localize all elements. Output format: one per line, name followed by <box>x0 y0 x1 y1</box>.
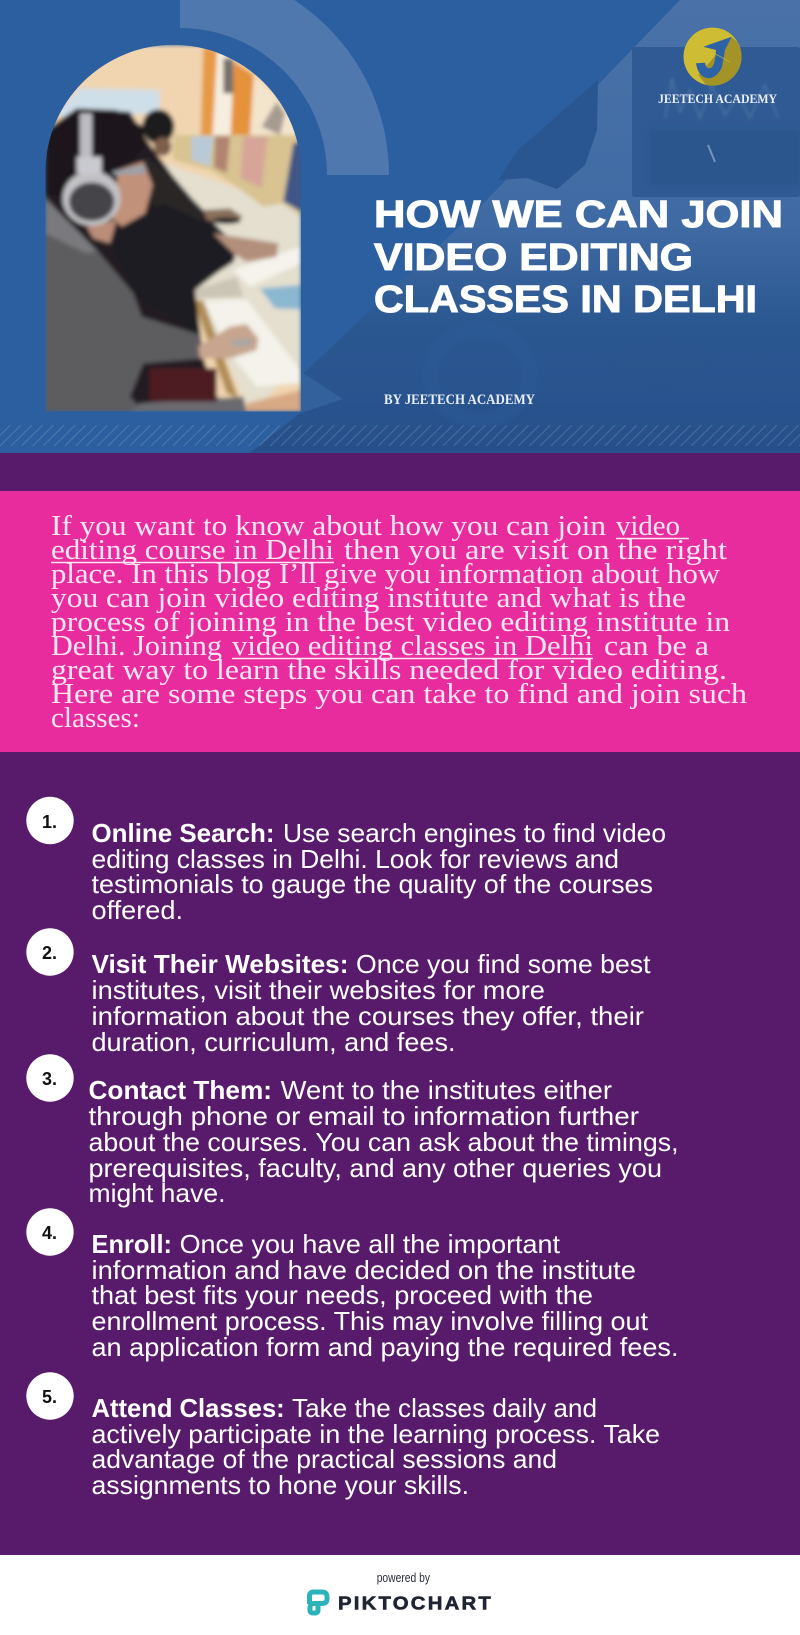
intro text <box>51 510 748 734</box>
step 4 <box>26 1208 679 1362</box>
intro text: editing course in Delhi <box>51 534 334 566</box>
step 2 text: Once you find some best <box>356 949 651 979</box>
step 4 text: Enroll: <box>92 1229 172 1259</box>
step 3 text: Went to the institutes either <box>281 1075 612 1105</box>
number badge 4: 4. <box>42 1223 57 1243</box>
step 4 text: an application form and paying the required fees. <box>92 1332 678 1362</box>
step 3 text: might have. <box>88 1178 226 1208</box>
step 2 <box>26 928 651 1057</box>
step 3 text: through phone or email to information further <box>88 1101 639 1131</box>
front student jacket <box>45 197 202 412</box>
intro text: can be a <box>604 630 709 662</box>
step 1 text: Use search engines to find video <box>283 818 666 848</box>
footer: powered by Piktochart <box>0 1555 800 1635</box>
step 1 text: offered. <box>92 895 183 925</box>
intro text: place. In this blog I’ll give you information about how <box>51 558 720 590</box>
headphones <box>80 113 92 160</box>
number badge 3: 3. <box>42 1069 57 1089</box>
back student <box>142 109 174 144</box>
desk <box>160 162 301 412</box>
icon: Piktochart logo mark <box>310 1592 327 1613</box>
step 1 <box>26 797 666 925</box>
number badge 1: 1. <box>42 812 57 832</box>
photo: students at computers in arch frame <box>45 45 301 412</box>
step 1 text: Online Search: <box>92 818 274 848</box>
decorative quarter ring <box>180 0 389 175</box>
intro text: video <box>616 510 680 542</box>
step 3 text: prerequisites, faculty, and any other queries you <box>88 1153 662 1183</box>
logo: Jeetech Academy <box>658 28 778 106</box>
step 5 text: Attend Classes: <box>92 1393 285 1423</box>
step 2 text: Visit Their Websites: <box>92 949 348 979</box>
byline: BY JEETECH ACADEMY <box>384 392 535 408</box>
step 2 text: information about the courses they offer, their <box>92 1001 644 1031</box>
footer: powered by Piktochart: PIKTOCHART <box>338 1592 493 1614</box>
step 2 text: duration, curriculum, and fees. <box>92 1027 456 1057</box>
intro text: great way to learn the skills needed for video editing. <box>51 654 727 686</box>
intro text: video editing classes in Delhi <box>232 630 593 662</box>
intro text: Delhi. Joining <box>51 630 222 662</box>
step 5 text <box>92 1393 660 1500</box>
title: CLASSES IN DELHI <box>374 279 757 321</box>
intro text: process of joining in the best video editing institute in <box>51 606 731 638</box>
number badge 5: 5. <box>42 1387 57 1407</box>
step 5 text: actively participate in the learning process. Take <box>92 1419 660 1449</box>
step 5 text: Take the classes daily and <box>292 1393 597 1423</box>
intro text: then you are visit on the right <box>344 534 727 566</box>
number badge 4 <box>26 1208 74 1256</box>
title: HOW WE CAN JOIN <box>374 194 783 236</box>
monitors <box>173 135 301 217</box>
intro text: Here are some steps you can take to find and join such <box>51 678 748 710</box>
step 3 text: Contact Them: <box>88 1075 272 1105</box>
step 5 text: assignments to hone your skills. <box>92 1470 469 1500</box>
step 4 text: enrollment process. This may involve filling out <box>92 1306 649 1336</box>
footer: powered by Piktochart: powered by <box>377 1570 430 1585</box>
faded background photo <box>250 0 800 453</box>
step 1 text: editing classes in Delhi. Look for reviews and <box>92 844 619 874</box>
step 5 text: advantage of the practical sessions and <box>92 1444 557 1474</box>
keyboard <box>203 299 300 387</box>
step 3 text <box>88 1075 678 1208</box>
step 5 <box>26 1372 660 1500</box>
hands <box>198 324 258 358</box>
intro text: you can join video editing institute and what is the <box>51 582 686 614</box>
step 4 text: Once you have all the important <box>180 1229 561 1259</box>
step 2 text: institutes, visit their websites for more <box>92 975 545 1005</box>
step 3 text: about the courses. You can ask about the timings, <box>88 1127 678 1157</box>
intro text: If you want to know about how you can join <box>51 510 607 542</box>
title <box>374 194 783 321</box>
dark base behind students <box>45 108 243 412</box>
step 1 text <box>92 818 666 925</box>
papers on desk <box>260 285 301 309</box>
front student hair and face <box>46 108 148 192</box>
number badge 1 <box>26 797 74 844</box>
step 1 text: testimonials to gauge the quality of the courses <box>92 869 653 899</box>
step 2 text <box>92 949 651 1057</box>
step 4 text: information and have decided on the institute <box>92 1255 636 1285</box>
number badge 3 <box>26 1054 74 1102</box>
step 3 <box>26 1054 679 1208</box>
header panel <box>0 0 800 453</box>
logo: Jeetech Academy: JEETECH ACADEMY <box>658 91 778 106</box>
title: VIDEO EDITING <box>374 237 693 279</box>
step 4 text <box>92 1229 678 1362</box>
number badge 2: 2. <box>42 943 57 963</box>
intro text: classes: <box>51 702 140 734</box>
number badge 2 <box>26 928 74 976</box>
panel: intro <box>0 491 800 752</box>
middle student <box>156 206 236 271</box>
step 4 text: that best fits your needs, proceed with the <box>92 1280 593 1310</box>
number badge 5 <box>26 1372 74 1420</box>
